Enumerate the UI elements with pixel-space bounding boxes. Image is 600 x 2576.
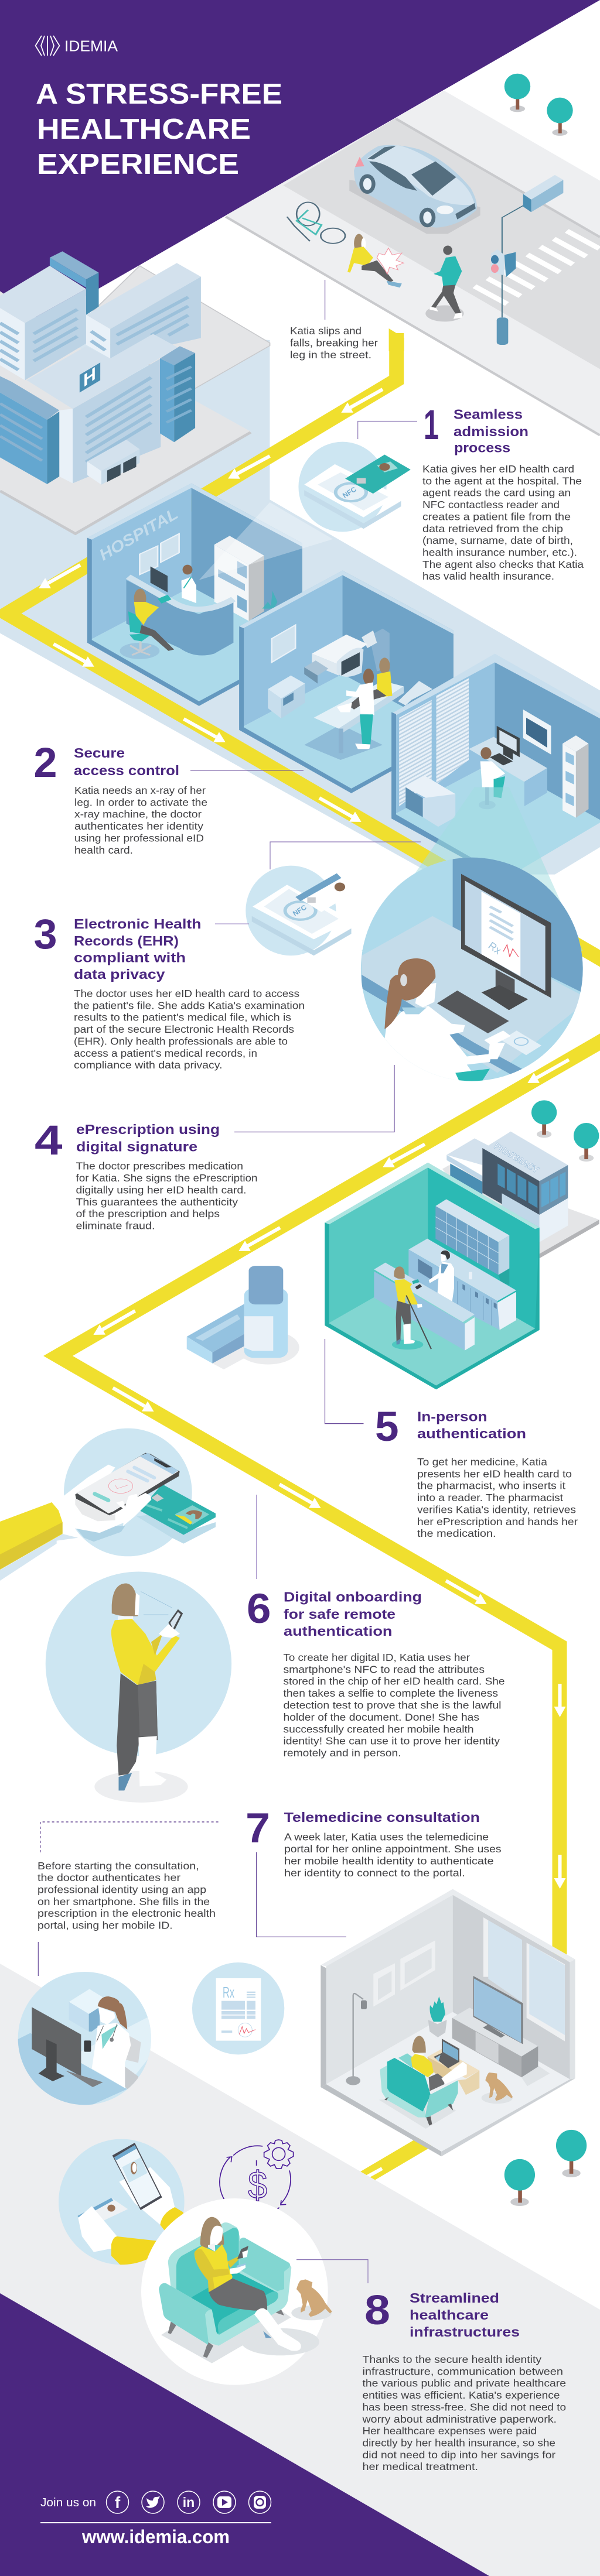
step heading [74, 745, 179, 778]
zoom circle: doctor with smartphone [18, 1972, 154, 2108]
step text: eliminate fraud. [76, 1220, 155, 1231]
armchair [379, 2053, 458, 2129]
step text: authenticates her identity [74, 820, 203, 832]
step heading: admission [454, 424, 529, 439]
callout: doctor authentication [38, 1860, 216, 1931]
step text: her mobile health identity to authenticate [284, 1855, 494, 1866]
icon: linkedin [178, 2491, 200, 2513]
panel: telemedicine living room [321, 1889, 575, 2156]
step text: This guarantees the authenticity [76, 1196, 238, 1208]
title: A STRESS-FREE [36, 78, 282, 110]
icon: medicine box and bottle [187, 1266, 299, 1369]
step text: portal for her online appointment. She uses [284, 1843, 502, 1855]
step text: the patient's file. She adds Katia's examination [74, 999, 305, 1011]
hand shadow [74, 1526, 125, 1542]
footer [40, 2491, 271, 2547]
zoom circle: professional eID card [246, 866, 362, 955]
step text: the various public and private healthcare [362, 2378, 566, 2389]
caption: accident: falls, breaking her [290, 337, 378, 349]
hospital building [0, 251, 201, 485]
trees bottom right [504, 2130, 587, 2206]
step text: compliance with data privacy. [74, 1059, 223, 1071]
step text: presents her eID health card to [417, 1468, 572, 1479]
step text: holder of the document. Done! She has [284, 1711, 479, 1723]
card shadow [137, 1515, 216, 1544]
crosswalk [475, 231, 599, 304]
step text: infrastructure, communication between [362, 2365, 563, 2377]
television [473, 1976, 523, 2044]
smartphone [75, 1453, 180, 1515]
x-ray machine [304, 629, 390, 684]
receptionist [182, 565, 196, 603]
pharmacy building [446, 1132, 568, 1242]
icon: hospital H sign: H [83, 362, 96, 392]
icon: passer-by [425, 246, 464, 321]
caption: accident [290, 325, 378, 361]
entrance block [87, 440, 139, 485]
x-ray picture [523, 710, 551, 755]
trees near pharmacy [531, 1100, 599, 1162]
dog [296, 2279, 332, 2317]
callout: doctor authentication: Before starting the consultation, [38, 1860, 199, 1872]
desktop monitor [461, 874, 551, 1010]
zoom circle: selfie verification [46, 1571, 231, 1803]
step 4 [35, 1118, 258, 1231]
zoom circle: electronic health records [246, 855, 600, 1084]
step text: into a reader. The pharmacist [417, 1492, 563, 1503]
step 1 [422, 402, 584, 582]
exam table [314, 681, 404, 753]
step text: then takes a selfie to complete the liveness [284, 1687, 498, 1699]
beam from reader to desk [199, 502, 333, 580]
light beam to zoom circle [362, 787, 583, 951]
seated patient [120, 589, 174, 659]
step text: results to the patient's medical file, which is [74, 1012, 291, 1023]
step text: the pharmacist, who inserts it [417, 1480, 565, 1492]
street scene [226, 74, 600, 436]
front wing [27, 334, 178, 484]
step heading [417, 1409, 526, 1441]
step text: agent reads the card using an [422, 487, 571, 499]
patient with crutch [392, 1266, 431, 1349]
phone shadow [75, 1499, 115, 1521]
step text: (name, surname, date of birth, [422, 535, 573, 546]
pharmacist [429, 1251, 454, 1301]
step text: Her healthcare expenses were paid [362, 2425, 537, 2437]
icon: dollar sign: $ [248, 2163, 267, 2207]
desk [469, 737, 547, 806]
step heading: Streamlined [410, 2290, 499, 2306]
panel: x-ray room [239, 570, 454, 793]
label: NFC on second reader: NFC [291, 903, 308, 918]
step text: digitally using her eID health card. [76, 1184, 246, 1195]
icon: facebook [107, 2491, 129, 2513]
step number: 8 [364, 2287, 390, 2334]
pharmacy room walls [325, 1163, 540, 1389]
wall frame [272, 625, 295, 662]
zoom circle: Katia with phone and card [59, 2139, 185, 2266]
panel: pharmacy [325, 1132, 599, 1389]
floor shadows [161, 2306, 332, 2363]
icon: youtube [213, 2491, 236, 2513]
TV cabinet [452, 2008, 550, 2086]
pharmacy platform [442, 1165, 599, 1258]
step text [422, 463, 584, 582]
middle wing [86, 263, 201, 358]
keyboard [437, 991, 509, 1033]
icon: twitter [142, 2491, 164, 2513]
cabinet [268, 676, 305, 718]
step heading [284, 1590, 422, 1639]
armchair [159, 2222, 291, 2346]
step text: identity! She can use it to prove her identity [284, 1735, 500, 1747]
front hospital platform [0, 291, 251, 534]
icon: bicycle [287, 202, 345, 244]
step heading [454, 406, 529, 455]
icon: linkedin: in [183, 2495, 195, 2510]
step text: the medication. [417, 1527, 496, 1539]
step number: 1 [424, 402, 439, 448]
icon: trees [504, 74, 573, 136]
bookcase [562, 735, 588, 818]
scene rooms [87, 442, 600, 951]
step heading: healthcare [410, 2307, 489, 2322]
step text: successfully created her mobile health [284, 1723, 473, 1735]
doctor [346, 669, 374, 749]
step text [362, 2354, 566, 2472]
left front tower [0, 376, 59, 484]
callout: doctor authentication: on her smartphone. She fills in the [38, 1896, 210, 1907]
Katia on video call [411, 2036, 467, 2091]
right tower [160, 346, 195, 442]
step 2 [34, 740, 207, 856]
callout: doctor authentication: prescription in the electronic health [38, 1907, 216, 1919]
step text [284, 1831, 502, 1879]
step heading: Seamless [454, 406, 523, 422]
step text: Katia needs an x-ray of her [74, 785, 206, 796]
panel: reception room [87, 483, 302, 706]
doctor's chair [125, 2036, 141, 2089]
panel: doctor's office [362, 653, 600, 951]
icon: car [349, 145, 480, 234]
step heading: Electronic Health [74, 916, 202, 931]
step heading: digital signature [76, 1139, 197, 1155]
step text: x-ray machine, the doctor [74, 809, 202, 820]
step text [74, 988, 305, 1071]
Katia figure [195, 2217, 301, 2351]
purple title banner [0, 0, 600, 345]
potted plant [428, 1996, 447, 2037]
step 3 [34, 912, 305, 1071]
yellow path continuation [58, 1030, 600, 2219]
step number: 3 [34, 912, 57, 958]
step 8 [362, 2287, 566, 2472]
website: www.idemia.com [81, 2526, 230, 2547]
icon: facebook: f [115, 2493, 121, 2512]
title: HEALTHCARE [37, 114, 251, 145]
callout: doctor authentication: portal, using her mobile ID. [38, 1920, 173, 1931]
title: EXPERIENCE [37, 149, 239, 180]
caption: accident: leg in the street. [290, 349, 371, 361]
step heading [76, 1122, 220, 1155]
title [36, 78, 282, 180]
logo mark [35, 36, 60, 56]
chair legs [168, 2310, 284, 2358]
doctor coat [383, 1006, 492, 1084]
step text: has valid health insurance. [422, 570, 554, 582]
dog [482, 2073, 513, 2104]
yellow sleeve [0, 1502, 63, 1570]
hand on phone [119, 2167, 175, 2225]
step heading [74, 916, 202, 982]
step text: (EHR). Only health professionals are able to [74, 1035, 288, 1047]
step heading [410, 2290, 520, 2339]
step number: 4 [35, 1118, 63, 1164]
hair [384, 958, 435, 1029]
sliding doors [399, 678, 469, 806]
step heading: infrastructures [410, 2324, 520, 2339]
monitor [151, 566, 168, 592]
step number: 2 [34, 740, 57, 786]
yellow patient journey path [7, 333, 600, 971]
label: NFC on first reader: NFC [341, 485, 358, 500]
step text: using her professional eID [74, 832, 204, 844]
step text: health card. [74, 844, 133, 856]
step text: part of the secure Electronic Health Records [74, 1023, 294, 1035]
step heading: compliant with [74, 950, 186, 965]
laptop [434, 2039, 459, 2068]
side table [398, 681, 432, 705]
step heading: In-person [417, 1409, 488, 1424]
yellow sleeves [111, 2236, 156, 2265]
icon: traffic light [491, 175, 563, 345]
step text: worry about administrative paperwork. [362, 2413, 557, 2425]
step text [76, 1160, 258, 1231]
footer divider [40, 2522, 271, 2523]
step heading: access control [74, 763, 179, 778]
step text: NFC contactless reader and [422, 499, 560, 511]
step heading: Secure [74, 745, 125, 761]
wall frames [373, 1940, 435, 2006]
medicine shelves [435, 1199, 509, 1285]
floor lamp [346, 1993, 367, 2085]
step text: A week later, Katia uses the telemedicine [284, 1831, 489, 1843]
step text: To get her medicine, Katia [417, 1456, 547, 1468]
caption: accident: Katia slips and [290, 325, 362, 337]
connector lines [38, 280, 421, 2283]
ID card [77, 2198, 128, 2220]
back tower [50, 251, 98, 315]
step text: has been stress-free. She did not need to [362, 2401, 566, 2413]
back hospital platform [77, 266, 270, 388]
pale ground behind hospital rooms [0, 318, 600, 875]
step text: access a patient's medical records, in [74, 1047, 257, 1059]
step heading: data privacy [74, 967, 165, 982]
gray bottom band [0, 1964, 600, 2576]
step text: detection test to prove that she is the lawful [284, 1699, 502, 1711]
step 7 [246, 1806, 502, 1879]
step number: 5 [375, 1404, 399, 1450]
shelves [214, 536, 264, 621]
arrows on the path [48, 389, 569, 2187]
step text: Thanks to the secure health identity [362, 2354, 541, 2365]
monitor [32, 2007, 103, 2087]
zoom circle: phone reading card [0, 1429, 216, 1581]
social label: Join us on [40, 2496, 96, 2509]
top end of yellow path [389, 328, 404, 351]
floor [329, 1266, 535, 1386]
sidewalk [226, 91, 600, 434]
step text: her medical treatment. [362, 2461, 478, 2472]
hand [63, 1465, 151, 1533]
step text: directly by her health insurance, so she [362, 2437, 555, 2448]
desktop monitor [490, 726, 520, 765]
step heading: Records (EHR) [74, 933, 179, 948]
callout: doctor authentication: the doctor authenticates her [38, 1872, 180, 1883]
wall frames [139, 534, 179, 574]
step heading: authentication [417, 1426, 526, 1441]
smartphone [112, 2143, 162, 2210]
hand on card [78, 2206, 117, 2252]
wall unit [69, 1989, 103, 2032]
arm shadow [0, 1534, 78, 1581]
step heading: Telemedicine consultation [284, 1810, 480, 1825]
step text: smartphone's NFC to read the attributes [284, 1663, 485, 1675]
doctor at desk [479, 747, 505, 809]
step text: leg. In order to activate the [74, 796, 207, 808]
step 5 [375, 1404, 578, 1539]
step heading: authentication [284, 1623, 393, 1639]
step heading: Digital onboarding [284, 1590, 422, 1605]
front counter [374, 1263, 475, 1351]
label: pharmacy sign: PHARMACY [492, 1141, 540, 1176]
step number: 7 [246, 1806, 270, 1851]
floor boxes [405, 776, 455, 827]
step text: creates a patient file from the [422, 511, 571, 522]
step text: to the agent at the hospital. The [422, 475, 582, 487]
step text: verifies Katia's identity, retrieves [417, 1503, 576, 1515]
step 6 [247, 1586, 505, 1759]
step text [74, 785, 207, 856]
back counter [408, 1239, 516, 1330]
step text: The doctor uses her eID health card to access [74, 988, 299, 999]
step text: The doctor prescribes medication [76, 1160, 243, 1172]
logo [35, 36, 118, 56]
eID card [139, 1484, 216, 1535]
step text: health insurance number, etc.). [422, 546, 577, 558]
step text: of the prescription and helps [76, 1208, 220, 1220]
step text: entities was efficient. Katia's experience [362, 2389, 560, 2401]
zoom circle: admission card reader [298, 442, 411, 532]
label: hospital sign: HOSPITAL [96, 505, 181, 564]
road [283, 118, 600, 369]
step heading: ePrescription using [76, 1122, 220, 1137]
step text: data retrieved from the chip [422, 523, 563, 535]
step text: The agent also checks that Katia [422, 559, 584, 570]
step text: for Katia. She signs the ePrescription [76, 1172, 258, 1184]
logo wordmark: IDEMIA [64, 37, 118, 55]
step text [417, 1456, 578, 1539]
doctor in coat [92, 2023, 131, 2088]
icon: instagram [248, 2491, 271, 2513]
reception counter [127, 577, 233, 656]
doctor face [415, 983, 437, 1008]
step text: remotely and in person. [284, 1747, 401, 1759]
icon: Katia fallen [347, 234, 404, 287]
step text: her identity to connect to the portal. [284, 1867, 465, 1879]
coffee table [427, 2049, 479, 2095]
step heading: for safe remote [284, 1606, 396, 1622]
icon: Rx on monitor: Rx [486, 940, 503, 957]
step text: her ePrescription and hands her [417, 1516, 578, 1527]
step text: did not need to dip into her savings for [362, 2449, 555, 2461]
left wing [0, 266, 86, 381]
step text: To create her digital ID, Katia uses her [284, 1652, 470, 1663]
purple footer banner [0, 2293, 489, 2576]
patient on table [337, 657, 392, 712]
step text [284, 1652, 505, 1759]
windows [483, 1917, 565, 2041]
zoom circle: Katia resting on armchair [141, 2198, 332, 2385]
step text: Katia gives her eID health card [422, 463, 574, 475]
icon: Rx on prescription: Rx [223, 1984, 234, 2001]
icon: money and gear cycle [220, 2140, 294, 2217]
step text: stored in the chip of her eID health card. She [284, 1676, 505, 1687]
callout: doctor authentication: professional identity using an app [38, 1884, 206, 1896]
zoom circle: prescription [192, 1962, 284, 2054]
card and small reader [484, 1030, 541, 1055]
fingers [116, 1493, 151, 1526]
step heading: process [454, 440, 510, 455]
step number: 6 [247, 1586, 271, 1632]
